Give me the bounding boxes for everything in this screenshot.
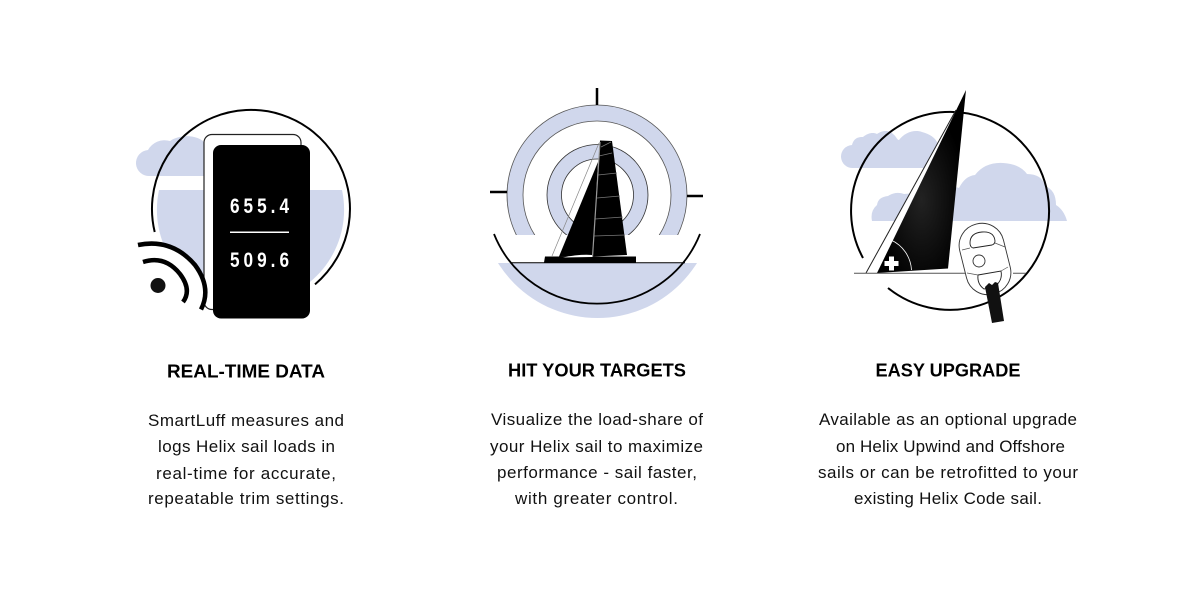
horizon <box>510 262 685 264</box>
plus mark <box>884 256 898 270</box>
body text: SmartLuff measures and <box>148 411 344 430</box>
heading: HIT YOUR TARGETS <box>508 360 686 380</box>
body text: performance - sail faster, <box>497 463 697 482</box>
body text: logs Helix sail loads in <box>158 437 335 456</box>
panel: real-time data <box>136 110 350 508</box>
body text <box>148 411 344 508</box>
body text: on Helix Upwind and Offshore <box>836 437 1065 456</box>
body text: repeatable trim settings. <box>148 489 344 508</box>
panel: hit your targets <box>490 88 703 508</box>
body text: your Helix sail to maximize <box>490 437 703 456</box>
white load arc <box>891 240 912 270</box>
body text <box>818 410 1078 508</box>
body text: real-time for accurate, <box>156 464 336 483</box>
reading top: 655.4 <box>230 196 289 218</box>
icon: wireless signal <box>138 244 205 310</box>
blue bowl <box>156 190 344 282</box>
heading: REAL-TIME DATA <box>167 360 325 382</box>
lower cloud <box>872 163 1067 221</box>
horizon <box>854 272 1026 274</box>
outer ring <box>507 105 686 235</box>
circle outline <box>152 110 350 284</box>
hull <box>544 256 636 262</box>
strap <box>985 282 1004 323</box>
body text: with greater control. <box>514 489 678 508</box>
icon: phone with live data <box>136 110 350 318</box>
cloud <box>136 136 206 176</box>
icon: sail and shackle <box>841 90 1067 323</box>
jib sail <box>559 162 598 256</box>
back phone <box>204 134 301 310</box>
sail details <box>552 142 625 257</box>
divider <box>230 232 289 233</box>
body text <box>490 410 703 508</box>
circle outline <box>851 112 1049 310</box>
icon: shackle <box>954 219 1016 299</box>
icon: boat on target <box>490 88 703 318</box>
panel: easy upgrade <box>818 90 1078 508</box>
heading: EASY UPGRADE <box>876 360 1020 380</box>
forestay gap <box>866 90 966 273</box>
body text: Available as an optional upgrade <box>819 410 1077 429</box>
upper cloud <box>841 131 943 168</box>
front phone <box>213 145 310 318</box>
sail <box>877 90 966 273</box>
water <box>498 263 697 318</box>
main sail <box>592 140 627 256</box>
body text: existing Helix Code sail. <box>854 489 1042 508</box>
inner ring <box>554 152 641 238</box>
body text: sails or can be retrofitted to your <box>818 463 1078 482</box>
body text: Visualize the load-share of <box>491 410 703 429</box>
reading bottom: 509.6 <box>230 250 289 272</box>
circle arc <box>494 234 700 304</box>
target ticks <box>490 88 703 196</box>
